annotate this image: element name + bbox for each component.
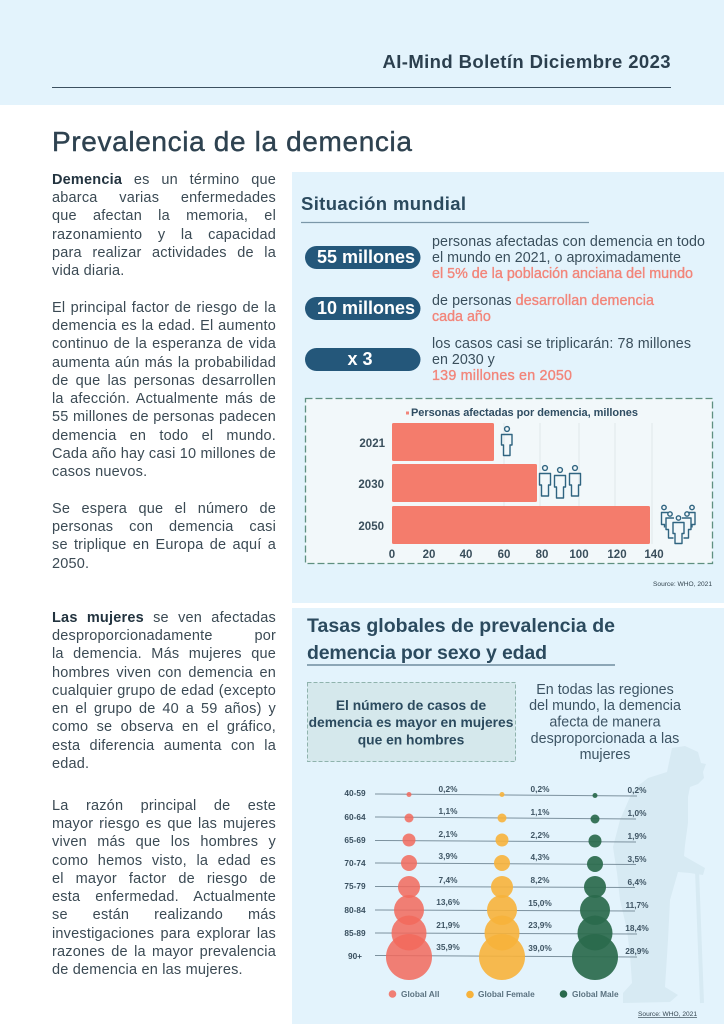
icon: people 2050 xyxy=(662,505,695,544)
text block: definition: abarca varias enfermedades xyxy=(52,190,276,206)
percentages: male: 1,9% xyxy=(628,831,647,841)
text block: women: la demencia. Más mujeres que xyxy=(52,646,276,662)
percentages: all: 13,6% xyxy=(436,897,460,907)
icon: people 2030 xyxy=(540,466,580,498)
percentages: male: 3,5% xyxy=(628,854,647,864)
age labels: 60-64 xyxy=(344,812,366,822)
text block: risk factor: demencia en todo el mundo. xyxy=(52,428,276,444)
percentages: all: 0,2% xyxy=(439,784,458,794)
text block: Europe xyxy=(52,501,276,572)
text block: women: cualquier grupo de edad (excepto xyxy=(52,683,276,699)
percentages: male: 18,4% xyxy=(625,923,649,933)
percentages: all: 2,1% xyxy=(439,829,458,839)
newsletter name: AI-Mind Boletín Diciembre 2023 xyxy=(382,51,671,72)
age labels: 70-74 xyxy=(344,858,366,868)
text block: women: como se observa en el gráfico, xyxy=(52,719,276,735)
text block: reason: como hemos visto, la edad es xyxy=(52,853,276,869)
text block: women: Las mujeres se ven afectadas xyxy=(52,610,276,626)
text block: reason: mayor riesgo es que las mujeres xyxy=(52,816,276,832)
bar chart: personas afectadas: 20 xyxy=(423,549,435,561)
icon: elderly silhouette xyxy=(613,746,706,1003)
bar chart: personas afectadas: 40 xyxy=(460,549,472,561)
stat: x 3: 139 millones en 2050 xyxy=(432,368,572,384)
legend xyxy=(389,989,619,999)
series: global female xyxy=(479,792,525,980)
bar chart: personas afectadas: 80 xyxy=(536,549,548,561)
text block: definition: que afectan la memoria, el xyxy=(52,208,276,224)
percentages: male: 1,0% xyxy=(628,808,647,818)
stat: 10 millones: cada año xyxy=(432,309,491,325)
stat: 55 millones: 55 millones xyxy=(317,247,415,267)
heading: situación mundial: Situación mundial xyxy=(301,193,466,214)
stat: 55 millones: personas afectadas con demencia en todo xyxy=(432,234,705,250)
text block: regiones: mujeres xyxy=(580,747,630,763)
source note: Source: WHO, 2021 xyxy=(638,1011,697,1018)
bar chart: personas afectadas xyxy=(306,398,712,564)
age labels: 80-84 xyxy=(344,905,366,915)
age labels: 65-69 xyxy=(344,835,366,845)
legend: Global Male xyxy=(572,989,619,999)
panel: situación mundial xyxy=(292,172,724,603)
text block: risk factor: casos nuevos. xyxy=(52,464,147,480)
stat: 10 millones: de personas desarrollan demencia xyxy=(432,293,654,309)
text block: reason: investigaciones para explorar las xyxy=(52,926,276,942)
bar chart: personas afectadas: 60 xyxy=(498,549,510,561)
text block: risk factor: la afección. Actualmente más de xyxy=(52,391,276,407)
callout: casos: El número de casos de xyxy=(336,698,486,713)
percentages: male xyxy=(625,785,649,956)
text block: regiones: afecta de manera xyxy=(549,714,661,730)
series: global male xyxy=(572,793,618,980)
percentages: female: 39,0% xyxy=(528,943,552,953)
text block: women xyxy=(52,610,276,772)
text block: Europe: Se espera que el número de xyxy=(52,501,276,517)
text block: risk factor: de que las personas desarrollen xyxy=(52,373,276,389)
text block: regiones: En todas las regiones xyxy=(536,682,674,698)
percentages: male: 0,2% xyxy=(628,785,647,795)
percentages: female: 8,2% xyxy=(531,875,550,885)
bar chart: personas afectadas: 120 xyxy=(607,549,627,561)
legend: Global All xyxy=(401,989,439,999)
text block: reason: esta enfermedad. Actualmente xyxy=(52,889,276,905)
text block: women: hombres viven con demencia en xyxy=(52,665,276,681)
bar chart: personas afectadas: 140 xyxy=(644,549,664,561)
percentages: all: 1,1% xyxy=(439,806,458,816)
series: global all xyxy=(386,792,432,980)
text block: regiones: del mundo, la demencia xyxy=(529,698,681,714)
text block: risk factor: El principal factor de riesgo de la xyxy=(52,300,276,316)
text block: definition: para realizar actividades de la xyxy=(52,245,276,261)
age labels xyxy=(344,788,366,961)
text block: women: edad. xyxy=(52,756,89,772)
text block: Europe: personas con demencia casi xyxy=(52,519,276,535)
percentages: female: 0,2% xyxy=(531,784,550,794)
legend: Global Female xyxy=(478,989,535,999)
callout: casos: que en hombres xyxy=(358,732,465,748)
text block: Europe: se triplique en Europa de aquí a xyxy=(52,537,276,553)
text block: regiones xyxy=(529,682,681,763)
chart: bubbles by age xyxy=(344,784,649,980)
text block: risk factor: demencia es la edad. El aumento xyxy=(52,318,276,334)
source note: Source: WHO, 2021 xyxy=(653,581,712,588)
percentages: male: 28,9% xyxy=(625,946,649,956)
text block: reason: el mayor factor de riesgo de xyxy=(52,871,276,887)
header band xyxy=(0,0,724,105)
stat: 10 millones: 10 millones xyxy=(317,298,415,318)
text block: reason: viven más que los hombres y xyxy=(52,834,276,850)
callout: casos xyxy=(308,682,516,762)
text block: definition: razonamiento y la capacidad xyxy=(52,227,276,243)
bar chart: personas afectadas: 2021 xyxy=(359,438,386,450)
bar chart: personas afectadas: 2030 xyxy=(358,479,384,491)
percentages: all: 21,9% xyxy=(436,920,460,930)
bar chart: personas afectadas: 2050 xyxy=(358,521,384,533)
stat: x 3: en 2030 y xyxy=(432,352,496,368)
panel: tasas globales xyxy=(292,608,724,1024)
stat: x 3: los casos casi se triplicarán: 78 millones xyxy=(432,336,691,352)
percentages: all: 7,4% xyxy=(439,875,458,885)
bar chart: personas afectadas: 0 xyxy=(389,549,395,561)
text block: risk factor: Cada año hay casi 10 millones de xyxy=(52,446,276,462)
age labels: 75-79 xyxy=(344,881,366,891)
heading: tasas globales: demencia por sexo y edad xyxy=(307,642,547,664)
percentages: female: 23,9% xyxy=(528,920,552,930)
percentages: all: 35,9% xyxy=(436,942,460,952)
percentages: male: 6,4% xyxy=(628,877,647,887)
text block: risk factor: continuo de la esperanza de vida xyxy=(52,336,276,352)
icon: cane xyxy=(697,870,702,1003)
title: Prevalencia de la demencia xyxy=(52,126,413,157)
text block: reason: se están realizando más xyxy=(52,907,276,923)
text block: regiones: desproporcionada a las xyxy=(531,731,679,747)
text block: definition xyxy=(52,172,276,279)
text block: women: en el grupo de 40 a 59 años) y xyxy=(52,701,276,717)
text block: women: esta diferencia aumenta con la xyxy=(52,738,276,754)
stat: x 3: x 3 xyxy=(347,349,373,369)
text block: reason: razones de la mayor prevalencia xyxy=(52,944,276,960)
header rule xyxy=(52,86,671,88)
text block: risk factor xyxy=(52,300,276,480)
text block: Europe: 2050. xyxy=(52,556,89,572)
text block: reason xyxy=(52,798,276,978)
percentages: female xyxy=(528,784,552,953)
bar chart: personas afectadas: 100 xyxy=(569,549,589,561)
percentages: female: 4,3% xyxy=(531,852,550,862)
text block: reason: La razón principal de este xyxy=(52,798,276,814)
percentages: female: 1,1% xyxy=(531,807,550,817)
age labels: 85-89 xyxy=(344,928,366,938)
bar chart: personas afectadas: Personas afectadas por demencia, millones xyxy=(411,407,638,419)
callout: casos: demencia es mayor en mujeres xyxy=(309,715,514,730)
text block: women: desproporcionadamente por xyxy=(52,628,276,644)
stat: x 3 xyxy=(305,336,691,384)
text block: definition: vida diaria. xyxy=(52,263,125,279)
percentages: female: 2,2% xyxy=(531,830,550,840)
stat: 10 millones xyxy=(305,293,654,325)
percentages: all: 3,9% xyxy=(439,851,458,861)
stat: 55 millones: el mundo en 2021, o aproximadamente xyxy=(432,250,681,266)
percentages: male: 11,7% xyxy=(625,900,649,910)
heading: tasas globales xyxy=(307,615,615,664)
icon: people 2021 xyxy=(502,427,512,456)
heading: tasas globales: Tasas globales de prevalencia de xyxy=(307,615,615,637)
text block: risk factor: aumenta aún más la probabilidad xyxy=(52,355,276,371)
text block: risk factor: 55 millones de personas padecen xyxy=(52,409,276,425)
text block: reason: de demencia en las mujeres. xyxy=(52,962,243,978)
age labels: 90+ xyxy=(348,951,362,961)
percentages: all xyxy=(436,784,460,952)
percentages: female: 15,0% xyxy=(528,898,552,908)
stat: 55 millones xyxy=(305,234,705,282)
age labels: 40-59 xyxy=(344,788,366,798)
stat: 55 millones: el 5% de la población anciana del mundo xyxy=(432,266,693,282)
text block: definition: Demencia es un término que xyxy=(52,172,276,188)
